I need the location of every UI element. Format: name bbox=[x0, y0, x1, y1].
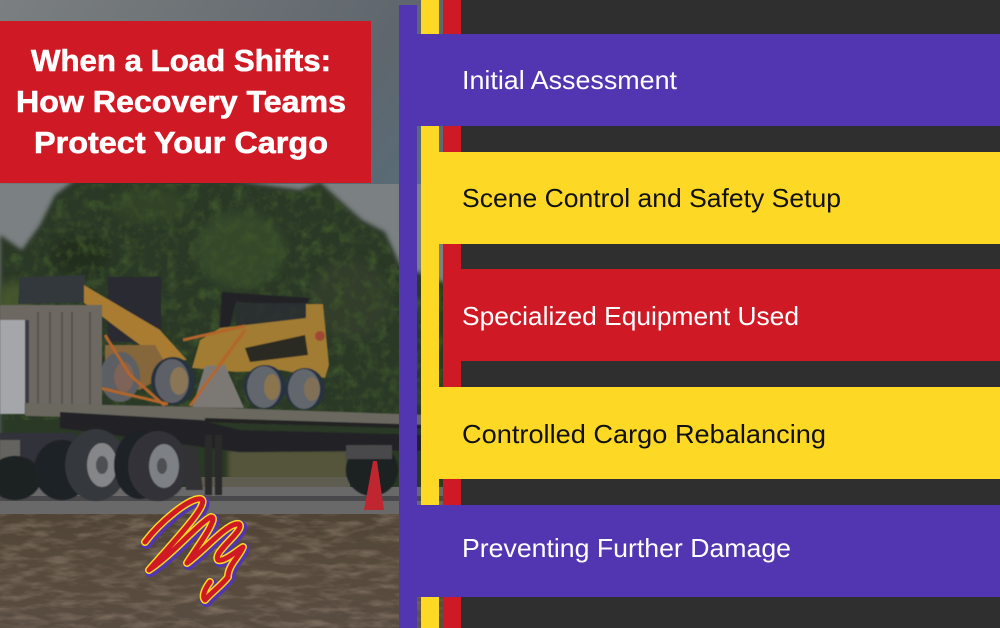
step 4: Controlled Cargo Rebalancing: Controlled Cargo Rebalancing bbox=[462, 419, 826, 449]
title panel: When a Load Shifts: bbox=[31, 43, 331, 78]
vertical stripe: red bbox=[443, 0, 461, 628]
dark background panel bbox=[461, 0, 1000, 628]
road and curb bbox=[0, 477, 462, 516]
title panel bbox=[0, 21, 371, 183]
vertical stripe: yellow bbox=[421, 0, 439, 628]
grass behind trailer bbox=[226, 450, 348, 477]
step 5: Preventing Further Damage bbox=[399, 505, 1000, 597]
truck wheels bbox=[0, 429, 398, 501]
vertical stripe: purple bbox=[399, 5, 417, 628]
back skid steer loader bbox=[18, 275, 195, 405]
background photo: truck hauling skid steers bbox=[0, 0, 462, 628]
step 1: Initial Assessment bbox=[399, 34, 1000, 126]
title panel: How Recovery Teams bbox=[16, 84, 346, 119]
step 1: Initial Assessment: Initial Assessment bbox=[462, 65, 678, 95]
tree line bbox=[0, 180, 462, 490]
flatbed trailer bbox=[0, 403, 462, 495]
title panel: Protect Your Cargo bbox=[34, 125, 328, 160]
step 4: Controlled Cargo Rebalancing bbox=[421, 387, 1000, 479]
step 3: Specialized Equipment Used: Specialized Equipment Used bbox=[462, 301, 799, 331]
container box on trailer bbox=[0, 305, 102, 415]
step 3: Specialized Equipment Used bbox=[443, 269, 1000, 361]
dirt ground bbox=[0, 514, 462, 628]
logo: script M and y monogram bbox=[145, 499, 244, 602]
front skid steer loader bbox=[100, 292, 329, 410]
traffic cone bbox=[364, 461, 384, 510]
step 2: Scene Control and Safety Setup: Scene Control and Safety Setup bbox=[462, 183, 841, 213]
step 2: Scene Control and Safety Setup bbox=[421, 152, 1000, 244]
step 5: Preventing Further Damage: Preventing Further Damage bbox=[462, 533, 791, 563]
